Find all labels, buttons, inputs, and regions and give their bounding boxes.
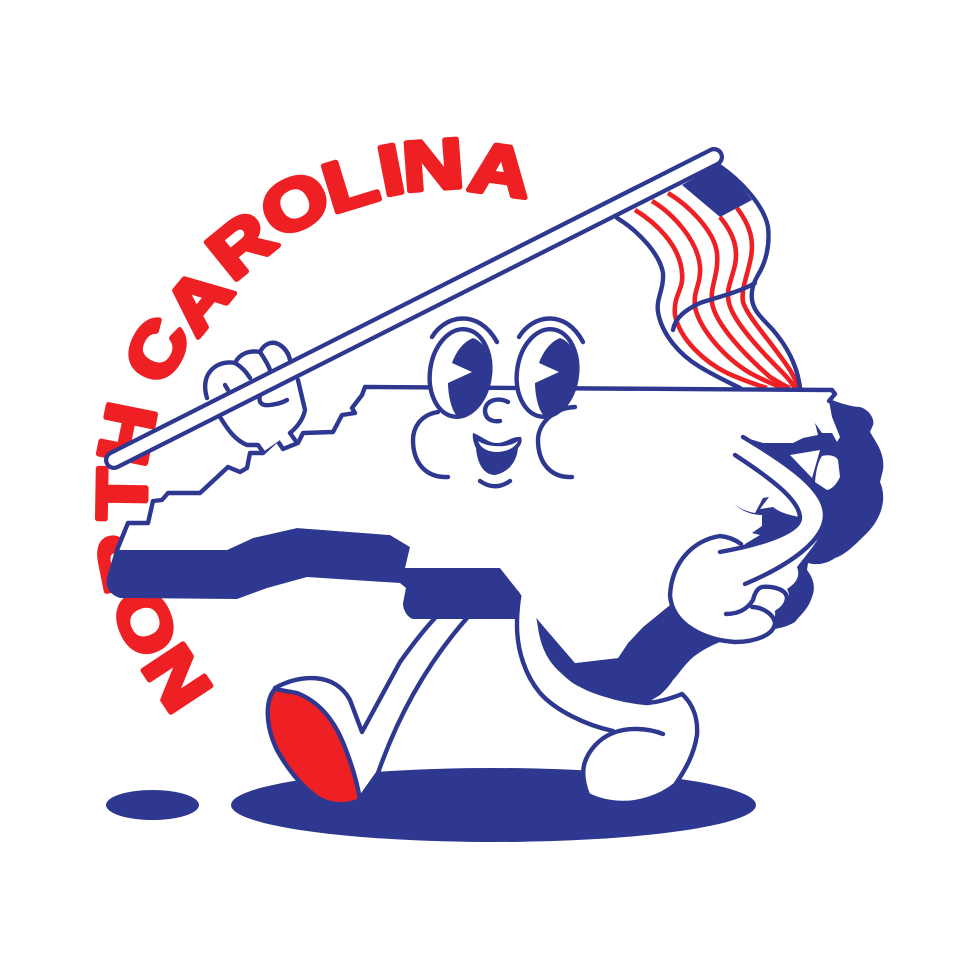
state body bbox=[117, 387, 840, 663]
state outline bbox=[117, 387, 835, 550]
front leg and shoe bbox=[268, 617, 467, 804]
back leg and foot bbox=[517, 578, 697, 803]
title: North Carolina curved text: N bbox=[128, 631, 227, 725]
right eye bbox=[511, 325, 583, 421]
small ground shadow bbox=[106, 790, 199, 820]
title: North Carolina curved text: R bbox=[81, 525, 170, 599]
left eye bbox=[424, 325, 496, 421]
title: North Carolina curved text: I bbox=[372, 130, 410, 211]
title: North Carolina curved text: H bbox=[83, 397, 172, 472]
title: North Carolina curved text: N bbox=[400, 124, 466, 207]
title: North Carolina curved text: L bbox=[314, 139, 386, 228]
state drop shadow bbox=[107, 528, 519, 619]
large ground shadow bbox=[231, 768, 756, 842]
title: North Carolina curved text: R bbox=[193, 196, 289, 295]
face bbox=[413, 318, 583, 486]
American flag bbox=[617, 165, 800, 388]
title: North Carolina curved text: C bbox=[109, 305, 206, 395]
title: North Carolina curved text: A bbox=[465, 128, 535, 213]
right side shadow blob bbox=[740, 400, 883, 630]
nose bbox=[485, 400, 508, 421]
title: North Carolina curved text: O bbox=[248, 155, 342, 254]
chin bbox=[480, 481, 510, 486]
hand holding the state bbox=[670, 437, 825, 642]
title: North Carolina curved text: T bbox=[83, 468, 162, 520]
flag pole bbox=[114, 157, 714, 460]
hand gripping the pole bbox=[205, 343, 305, 452]
title: North Carolina curved text: A bbox=[149, 252, 248, 348]
mouth bbox=[473, 433, 522, 475]
coastal inlet shadow bbox=[732, 497, 801, 548]
eyebrows bbox=[432, 318, 497, 342]
right cheek bbox=[538, 407, 575, 477]
left cheek bbox=[413, 412, 448, 477]
title: North Carolina curved text: O bbox=[97, 577, 194, 667]
back arm and leg shadow bbox=[536, 605, 720, 703]
red shoe sole bbox=[268, 689, 360, 804]
white gaps in side shadow bbox=[790, 450, 840, 490]
title: North Carolina curved text bbox=[81, 124, 535, 725]
